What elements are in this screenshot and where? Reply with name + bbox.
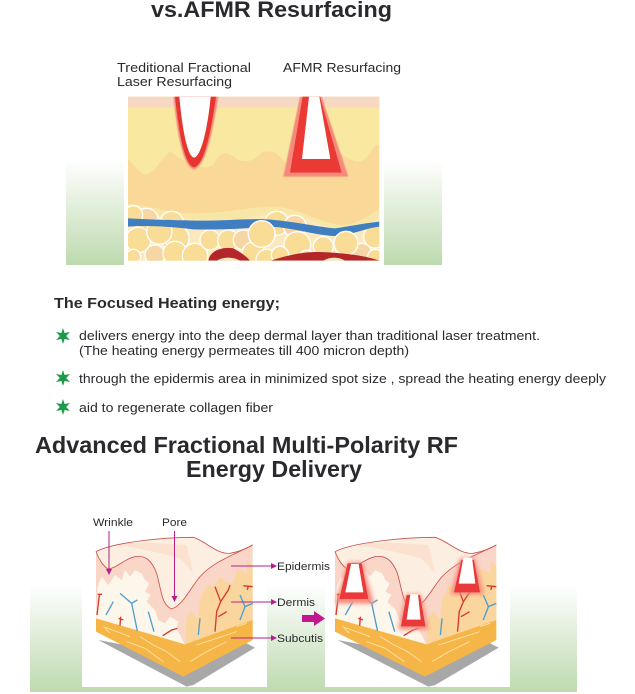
bullet list (56, 328, 607, 415)
label: Treditional Fractional Laser Resurfacing: Laser Resurfacing (117, 74, 232, 89)
icon: green star bullet (56, 399, 70, 415)
heat zone: right (451, 558, 484, 594)
bullet text: aid to regenerate: aid to regenerate collagen fiber (79, 400, 274, 415)
heading: Advanced Fractional Multi-Polarity RF Energy Delivery (35, 432, 458, 482)
illustration: skin block before treatment (96, 537, 255, 687)
label: AFMR Resurfacing: AFMR Resurfacing (283, 60, 401, 75)
icon: green star bullet (56, 328, 70, 344)
label: Dermis with arrow (231, 597, 316, 609)
label: Treditional Fractional Laser Resurfacing: Treditional Fractional (117, 60, 251, 75)
label: Wrinkle with arrow: Wrinkle (93, 517, 133, 529)
label: Pore with arrow (162, 517, 187, 602)
heat channel: fractional laser (173, 97, 218, 169)
label: Subcutis with arrow: Subcutis (277, 633, 324, 645)
arrow: before to after (302, 611, 325, 626)
heading: Advanced Fractional Multi-Polarity RF Energy Delivery: Advanced Fractional Multi-Polarity RF (35, 432, 458, 458)
label: Epidermis with arrow (231, 561, 331, 573)
label: Wrinkle with arrow (93, 517, 133, 575)
label: Pore with arrow: Pore (162, 517, 187, 529)
heat zone: middle (398, 594, 429, 630)
label: Treditional Fractional Laser Resurfacing (117, 60, 251, 89)
panel: green backdrop for skin diagrams (30, 585, 577, 692)
heading: Advanced Fractional Multi-Polarity RF Energy Delivery: Energy Delivery (186, 456, 362, 482)
label: Dermis with arrow: Dermis (277, 597, 316, 609)
label: Subcutis with arrow (231, 633, 324, 645)
heat channel: AFMR (283, 97, 348, 177)
panel: green backdrop right of comparison (384, 160, 442, 265)
bullet text: delivers energy: delivers energy into the deep dermal layer than traditional laser treatment. (79, 328, 540, 343)
panel: white card before (82, 510, 267, 687)
bullet text: delivers energy (79, 328, 540, 358)
chart: skin cross-section comparison (124, 97, 386, 271)
panel: white card after (325, 525, 510, 687)
label: Epidermis with arrow: Epidermis (277, 561, 331, 573)
heat zone: left (335, 562, 374, 604)
icon: green star bullet (56, 370, 70, 386)
panel: green backdrop left of comparison (66, 160, 124, 265)
heading: The Focused Heating energy: The Focused Heating energy; (54, 295, 280, 312)
illustration: skin block after treatment (335, 537, 499, 687)
bullet text: through the epidermis: through the epidermis area in minimized spot size , spread the heating energy deeply (79, 371, 607, 386)
bullet text: delivers energy: (The heating energy permeates till 400 micron depth) (79, 343, 409, 358)
